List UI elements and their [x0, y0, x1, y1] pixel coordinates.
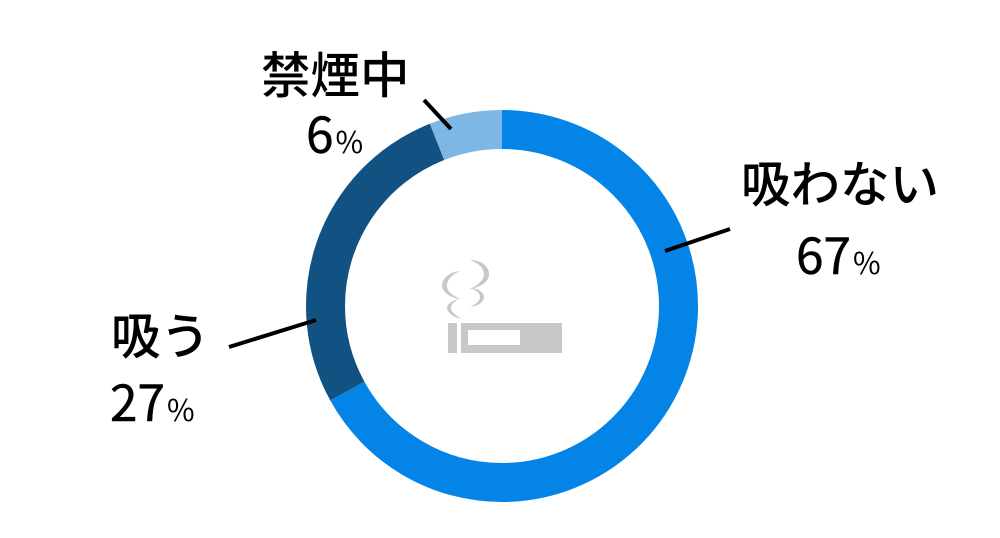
segment: quitting 6%	[326, 130, 678, 482]
label: smokers 27%	[110, 298, 210, 436]
leader line: smokers	[229, 320, 316, 347]
segment: non-smokers 67%	[326, 130, 678, 482]
leader line: quitting	[424, 100, 451, 129]
label: quitting 6%	[261, 37, 410, 168]
label heading: 吸う	[111, 298, 210, 369]
donut chart	[326, 130, 678, 482]
cigarette body	[461, 323, 562, 353]
label heading: 禁煙中	[261, 37, 410, 108]
label value: 67%	[796, 218, 881, 289]
label heading: 吸わない	[741, 146, 939, 217]
label: non-smokers 67%	[741, 146, 939, 289]
cigarette filter bar	[448, 323, 457, 353]
label value: 27%	[110, 365, 195, 436]
label value: 6%	[306, 97, 363, 168]
smoke curls	[442, 260, 489, 319]
segment: smokers 27%	[326, 130, 678, 482]
icon: cigarette with smoke	[442, 260, 562, 353]
leader line: non-smokers	[665, 229, 730, 251]
